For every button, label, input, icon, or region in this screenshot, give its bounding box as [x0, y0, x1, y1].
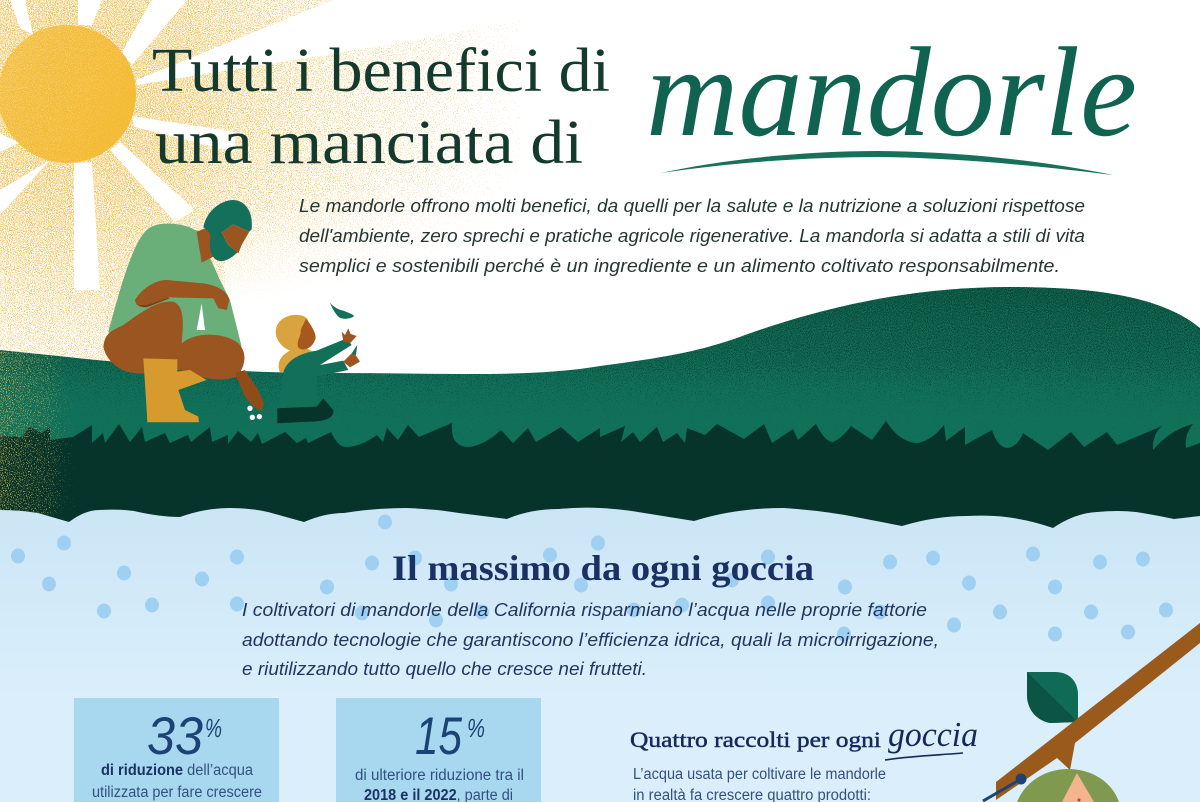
intro text block: semplici e sostenibili perché è un ingrediente e un alimento coltivato responsabilmente. [299, 256, 1060, 276]
text: four crops paragraph [633, 766, 886, 802]
title: script word mandorle: mandorle [646, 21, 1137, 163]
illustration: dark foreground grass [0, 421, 1200, 530]
title: Tutti i benefici di [152, 37, 610, 105]
illustration: sun rays [0, 0, 525, 540]
illustration: sand speckle over ground at left [0, 350, 75, 515]
title: una manciata di [155, 109, 583, 177]
illustration: seated child with leaf [276, 303, 360, 423]
illustration: almond branch with leaf and fruit [983, 623, 1200, 802]
stat card: 15%: 15 [415, 707, 462, 766]
title [152, 37, 610, 177]
subheading: quattro raccolti per ogni goccia: goccia [888, 715, 978, 754]
intro text block [299, 196, 1085, 276]
subheading: quattro raccolti per ogni goccia: Quattro raccolti per ogni [630, 727, 881, 752]
subheading: quattro raccolti per ogni goccia [630, 715, 978, 760]
section intro text: e riutilizzando tutto quello che cresce nei frutteti. [242, 659, 647, 679]
stat card: 15%: di ulteriore riduzione tra il [355, 767, 524, 784]
illustration: sun [0, 25, 136, 163]
illustration: water drops [11, 514, 1173, 642]
illustration: crouching man [103, 200, 264, 422]
intro text block: dell'ambiente, zero sprechi e pratiche agricole rigenerative. La mandorla si adatta a stili di vita [299, 226, 1085, 246]
text: four crops paragraph: L’acqua usata per coltivare le mandorle [633, 766, 886, 783]
stat card: 33%: utilizzata per fare crescere [92, 784, 262, 801]
section intro text [242, 600, 939, 679]
illustration: water background [0, 508, 1200, 802]
stat card: 15% [336, 698, 541, 802]
intro text block: Le mandorle offrono molti benefici, da quelli per la salute e la nutrizione a soluzioni rispettose [299, 196, 1085, 216]
stat card: 33%: 33 [147, 707, 203, 766]
section heading: Il massimo da ogni goccia [392, 548, 814, 588]
stat card: 33%: di riduzione dell’acqua [101, 762, 253, 779]
section intro text: adottando tecnologie che garantiscono l’efficienza idrica, quali la microirrigazione, [242, 630, 939, 650]
illustration: rolling green hill [0, 287, 1200, 460]
stat card: 15%: % [467, 713, 485, 743]
stat card: 33% [74, 698, 279, 802]
brush underline [661, 151, 1113, 175]
stat card: 33%: % [205, 713, 222, 743]
section intro text: I coltivatori di mandorle della California risparmiano l’acqua nelle proprie fattorie [242, 600, 927, 620]
